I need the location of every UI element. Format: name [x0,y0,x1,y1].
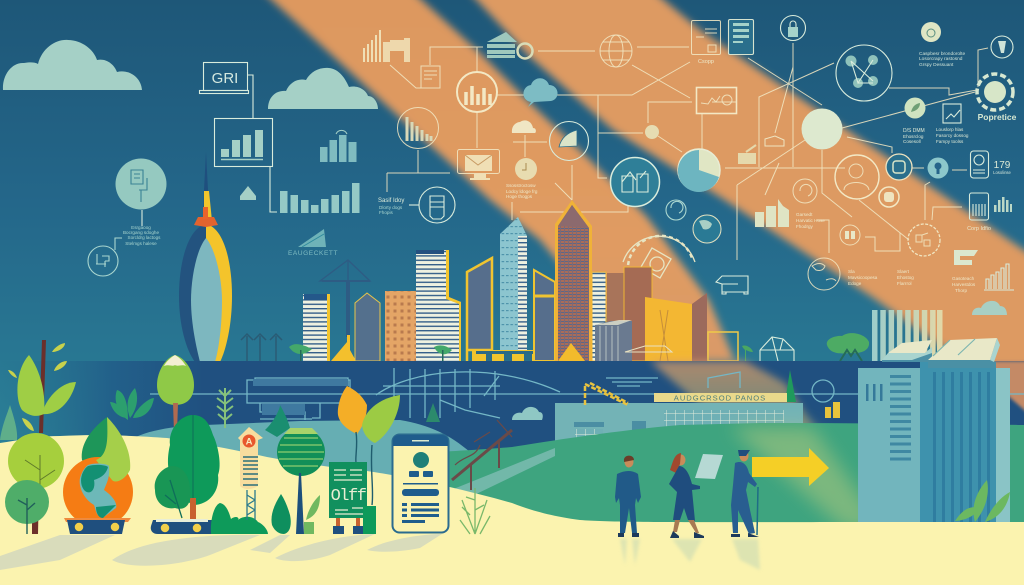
bare tree trunk [39,340,46,433]
network circle icon [836,45,892,101]
orange building [385,291,416,361]
value 179: Losolinse [993,170,1012,175]
small bush [271,494,291,534]
factory door [632,421,646,433]
crane yellow base [331,335,356,361]
caption corner: Harvestdos [952,282,976,287]
big leaf left [17,355,44,416]
report document icon [692,20,720,65]
trend chart icon [943,104,961,123]
small caption left: Bocrgang sdoghe [123,230,159,235]
large circle node [802,108,842,150]
document icon [421,66,440,88]
pine tree right [785,370,796,402]
snow tree crown [157,355,194,405]
small cloud right [972,301,1007,315]
caption lower right: Slaert [897,269,910,274]
checklist document icon [728,20,754,54]
caption Sasif Idoy: Fhopis [379,210,393,215]
connector document to caption [141,210,143,226]
device fingerprint icon [970,151,988,178]
caption Sasif Idoy: Sasif Idoy [378,198,404,204]
grey columns right [872,310,942,362]
bush [211,503,268,534]
small caption left: Esrgaoog [131,225,151,230]
orange light over strip right edge [968,361,1024,415]
gray house building [355,293,380,361]
small globe [693,215,721,243]
caption trend right: Fampy toolss [936,139,964,144]
caption trend left: D/S DMM [903,128,925,134]
striped tower [416,250,461,361]
GRI laptop icon [200,62,248,94]
crane [320,260,370,337]
orange diagonal light band upper [458,0,1024,416]
navy horizon strip [0,361,1024,461]
orange light over strip and hill [650,361,885,530]
tree branches [25,455,55,495]
report document icon: Csopp [698,59,714,65]
person with tablet [669,453,723,538]
outline machine icon [716,276,748,294]
round striped tree [277,428,325,534]
chart circle icon [610,158,660,206]
orange trunk [190,498,196,523]
circle arc icon [793,179,817,203]
sand foreground [0,435,1024,585]
small cloud icon [512,120,536,133]
bar chart small top [320,130,356,162]
caption lower right: Sla [848,269,855,274]
caption center: Ssosstroctosw [506,183,536,188]
back tree large [168,415,220,505]
caption Sasif Idoy: Dlorty dogs [379,205,403,210]
caption trend right: Fasorcy dossog [936,133,969,138]
circle bar chart [398,108,438,148]
gray roofed block [595,320,632,361]
caption top right: Grspy Dessuant [919,62,954,68]
yellow framed block [534,270,555,361]
person with suit [615,456,641,537]
leaf circle [904,98,926,118]
caption trend right: Louslorp hlas [936,127,964,132]
leaf right [42,382,76,414]
yellow striped block [592,272,606,361]
tall oval tower [179,152,232,362]
dot node [645,125,659,139]
person with cane [731,450,759,537]
yellow arrow [752,448,829,486]
tree small stem [18,498,35,534]
small sapling [742,345,753,361]
wireframe house [760,337,794,361]
fern [217,388,233,428]
orange glow on hill [730,427,885,530]
pylons [241,334,282,361]
small pine on strip [426,403,440,422]
caption trend left [903,128,925,144]
continents [81,465,116,518]
caption mid right: Garsedt [796,212,813,217]
caption corner [952,276,976,293]
Popretice label: Popretice [978,112,1017,122]
caption trend right [936,127,969,144]
tower vertical stripes [933,372,990,522]
factory sign with text: AUDGCRSOD PANOS [674,394,766,402]
grass plant [460,488,490,534]
green board [329,462,367,518]
Corp label: Corp Idfio [967,226,991,232]
small caption left: Stelmgs halese [125,241,157,246]
right wing [996,368,1010,522]
factory sign with text [654,393,787,402]
light stripe on hill [451,448,555,497]
snow tree trunk [173,403,178,433]
chart box [214,118,272,166]
green leaf [362,395,400,443]
caption trend left: Cosesoll [903,139,921,144]
caption top right: Losorcrapy rastosnd [919,56,963,62]
yellow leaf [338,386,367,434]
yellow outline block [708,332,738,361]
roof under panels [882,353,996,368]
caption lower right: Mavsicoopesa [848,275,878,280]
tall brown grid tower [555,200,592,361]
leaf stems [356,432,373,505]
sign with badge: A [246,436,253,448]
caption corner: Thorp [955,288,967,293]
person shadows [620,539,760,570]
connector chart box to bars [270,167,277,212]
small caption icon envelope [738,145,756,164]
tree round green [5,480,49,524]
factory building [555,383,803,451]
bottom center logo [288,229,338,257]
solar panel right [928,338,997,360]
yellow crane arm [585,383,628,405]
gear arc behind buildings [623,236,695,278]
bottom center logo: EAUGECKETT [288,250,338,257]
platform [472,350,548,361]
tree trunk [32,485,39,534]
value 179 [993,160,1012,175]
apple icon [921,22,941,42]
small front tree [155,466,190,509]
small caption left: Sorcldrg lactogs [128,235,161,240]
wooden bridge [452,420,512,490]
globe map shape [80,463,116,517]
green block beside board [363,506,376,534]
city skyline [179,152,869,362]
outline bar chart lower right [984,264,1014,290]
connector laptop to chart [248,75,253,118]
horizontal window rows [890,375,911,460]
person circle [835,155,879,199]
pill circle [840,225,860,245]
ground shadows [0,534,442,570]
caption lower right: Ehostog [897,275,914,280]
gear Popretice icon [977,74,1013,110]
caption mid right [796,212,825,229]
small cloud on strip [512,407,543,420]
globe right [808,258,840,290]
cart second [151,519,212,534]
brown slanted block [692,293,707,361]
database circle icon [419,187,455,223]
small power circle [666,200,686,220]
caption center [506,183,538,199]
connector database caption [409,204,419,206]
striped stack icon [487,32,517,58]
factory windows right [664,410,784,427]
brown blocks [607,273,625,361]
bar chart cream [755,199,789,227]
small building icon [765,136,784,146]
caption center: Hoge thogps [506,194,533,199]
back tree stem [192,415,194,505]
solar roof panel lower [262,404,305,415]
small tree branch [165,480,182,518]
shrub center left [110,388,154,420]
caption Sasif Idoy [378,198,404,215]
network diagram lines [387,43,988,260]
factory windows left [575,429,603,445]
leaf crown on globe left [82,417,112,466]
striped building A [303,294,330,361]
globe icon [600,35,632,67]
solar panel right edge [990,338,1000,362]
bars and block icon top [363,30,410,62]
plant by office [955,480,1010,522]
tree round light [8,433,64,489]
tree beside tower [434,345,452,361]
panel dividers [933,339,975,356]
office building [858,338,1010,522]
speech cloud [523,78,558,107]
caption top right: Caspbesr brondorolte [919,51,965,57]
cloud center [268,68,378,109]
fern next to striped tree [304,495,320,534]
caption corner: Gasoteach [952,276,975,281]
caption trend left: Ehosrclog [903,134,924,139]
board feet [333,526,363,534]
people walking [615,450,759,538]
small circle icon [88,246,118,276]
factory header bar [574,422,604,427]
home icon [240,186,256,200]
small windows [866,384,882,401]
monitor envelope [458,150,500,180]
board legs [336,518,360,526]
caption top right [919,51,965,68]
GRI label: GRI [212,70,238,87]
orange diagonal light band lower [250,0,735,361]
outlined low roof [625,346,672,352]
teal hill [120,420,470,510]
caption lower right: Edoge [848,281,862,286]
pulse chart panel [696,88,736,114]
document circle icon [116,158,166,210]
infrastructure line art [150,368,1024,420]
tree sapling left [289,344,312,361]
green board: Olff [331,487,367,506]
round tree right [827,333,869,361]
ring [879,187,899,207]
slanted gray tower [467,258,492,361]
gear ring left top [518,44,532,58]
yellow mini bars [825,402,840,418]
pie quarter circle icon [550,122,588,160]
clock node [515,158,537,180]
gear settings [908,224,940,256]
cart [64,518,131,534]
garden group left [0,340,512,534]
sign with badge [238,427,263,489]
ladder [247,490,255,520]
bush leaves behind sign [265,405,290,437]
blue main tower [920,362,996,522]
bar chart wide [280,183,360,213]
yellow tower [645,297,692,361]
solar panel left lip [882,347,932,360]
orange disc [63,457,133,527]
connector caption to circle [115,238,122,250]
caption center: Lodcy ldoge frg [506,189,538,194]
circle gauge arrows [457,72,497,112]
pie chart [678,149,720,192]
rings right [886,154,912,180]
brown block tall [624,267,652,361]
cloud left [3,40,142,90]
phone mockup [392,434,448,532]
fern far left [0,405,17,440]
solar panel left [888,340,932,353]
caption lower right: Flarrrol [897,281,912,286]
leaf crown right [96,417,130,482]
caption mid right: Fhodrgy [796,224,814,229]
caption lower right [848,269,914,286]
C shaped icon [954,250,978,265]
bud leaf tips [8,343,67,431]
device panel [970,193,988,220]
key circle top right [991,36,1013,58]
green hill [440,423,1024,530]
light blue tower [500,217,527,350]
solar roof panel left [253,379,348,386]
yellow pyramid [558,343,585,361]
light left wing [858,368,920,522]
value 179: 179 [994,160,1011,171]
keyhole node [928,158,948,178]
lock circle icon [780,16,806,40]
snow cap [164,355,186,366]
small caption left [123,225,161,246]
mini bars [994,197,1012,212]
caption mid right: Harvatic Hose [796,218,825,223]
